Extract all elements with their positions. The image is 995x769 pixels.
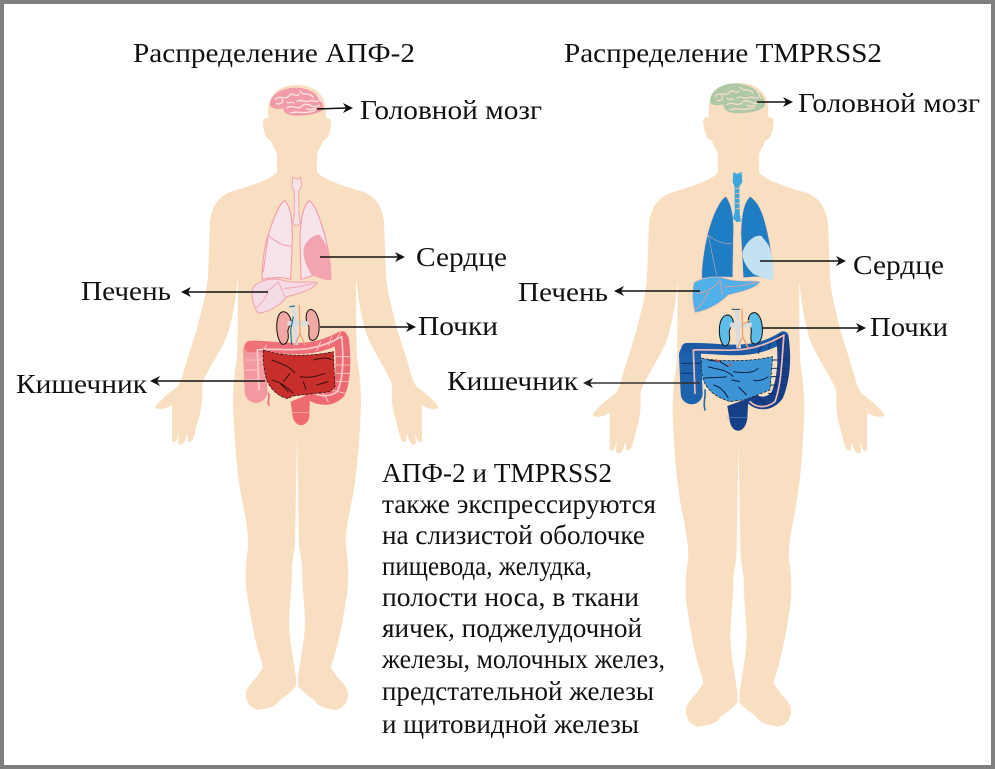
text block: additional expression sites: яичек, поджелудочной (382, 613, 642, 643)
text block: additional expression sites: на слизистой оболочке (382, 520, 645, 550)
text block: additional expression sites: предстательной железы (382, 676, 654, 706)
organs: TMPRSS2 chest and abdomen, right figure (682, 172, 788, 431)
arrow: right intestine (583, 378, 700, 388)
arrow: left intestine (150, 376, 265, 386)
organ: brain, left figure (270, 88, 323, 116)
text block: additional expression sites: железы, молочных желез, (381, 644, 665, 674)
label: right kidneys: Почки (870, 312, 948, 342)
trachea and thyroid (733, 172, 742, 222)
organs: ACE2 chest and abdomen, left figure (245, 177, 350, 425)
heart (303, 235, 331, 280)
body silhouette: left figure (155, 85, 439, 710)
liver (252, 279, 317, 313)
label: right intestine: Кишечник (447, 366, 579, 396)
kidneys and vessels (277, 312, 292, 344)
lungs (702, 197, 773, 279)
rectum (291, 394, 310, 425)
body silhouette: right figure (592, 83, 885, 727)
small intestine (701, 357, 773, 402)
arrow: left liver (181, 287, 268, 297)
label: right heart: Сердце (853, 250, 944, 280)
liver (693, 277, 760, 313)
arrow: right liver (614, 286, 700, 296)
label: right liver: Печень (518, 277, 608, 307)
small intestine (263, 350, 335, 399)
kidneys and vessels (719, 315, 733, 346)
colon (682, 334, 788, 410)
rectum (727, 398, 748, 431)
arrow: right brain (757, 97, 793, 107)
title: ACE2 distribution: Распределение АПФ-2 (133, 38, 415, 68)
text block: additional expression sites: полости носа, в ткани (382, 582, 639, 612)
label: left brain: Головной мозг (360, 95, 542, 125)
label: left intestine: Кишечник (16, 369, 148, 399)
label: left liver: Печень (81, 276, 171, 306)
arrow: right kidneys (762, 323, 866, 333)
label: left heart: Сердце (416, 242, 507, 272)
arrow: left kidneys (320, 322, 416, 332)
organ: brain, right figure (710, 83, 765, 113)
label: left kidneys: Почки (418, 311, 498, 341)
heart (742, 236, 773, 280)
trachea and thyroid (292, 177, 302, 226)
label: right brain: Головной мозг (798, 88, 980, 118)
colon (245, 331, 350, 405)
arrow: left brain (317, 103, 353, 113)
arrow: left heart (320, 252, 405, 262)
title: TMPRSS2 distribution: Распределение TMPRSS2 (564, 38, 882, 68)
text block: additional expression sites (381, 458, 665, 739)
text block: additional expression sites: пищевода, желудка, (382, 551, 592, 581)
text block: additional expression sites: и щитовидной железы (382, 709, 639, 739)
lungs (262, 201, 331, 279)
text block: additional expression sites: АПФ-2 и TMPRSS2 (382, 458, 612, 488)
text block: additional expression sites: также экспрессируются (382, 489, 656, 519)
arrow: right heart (760, 256, 846, 266)
